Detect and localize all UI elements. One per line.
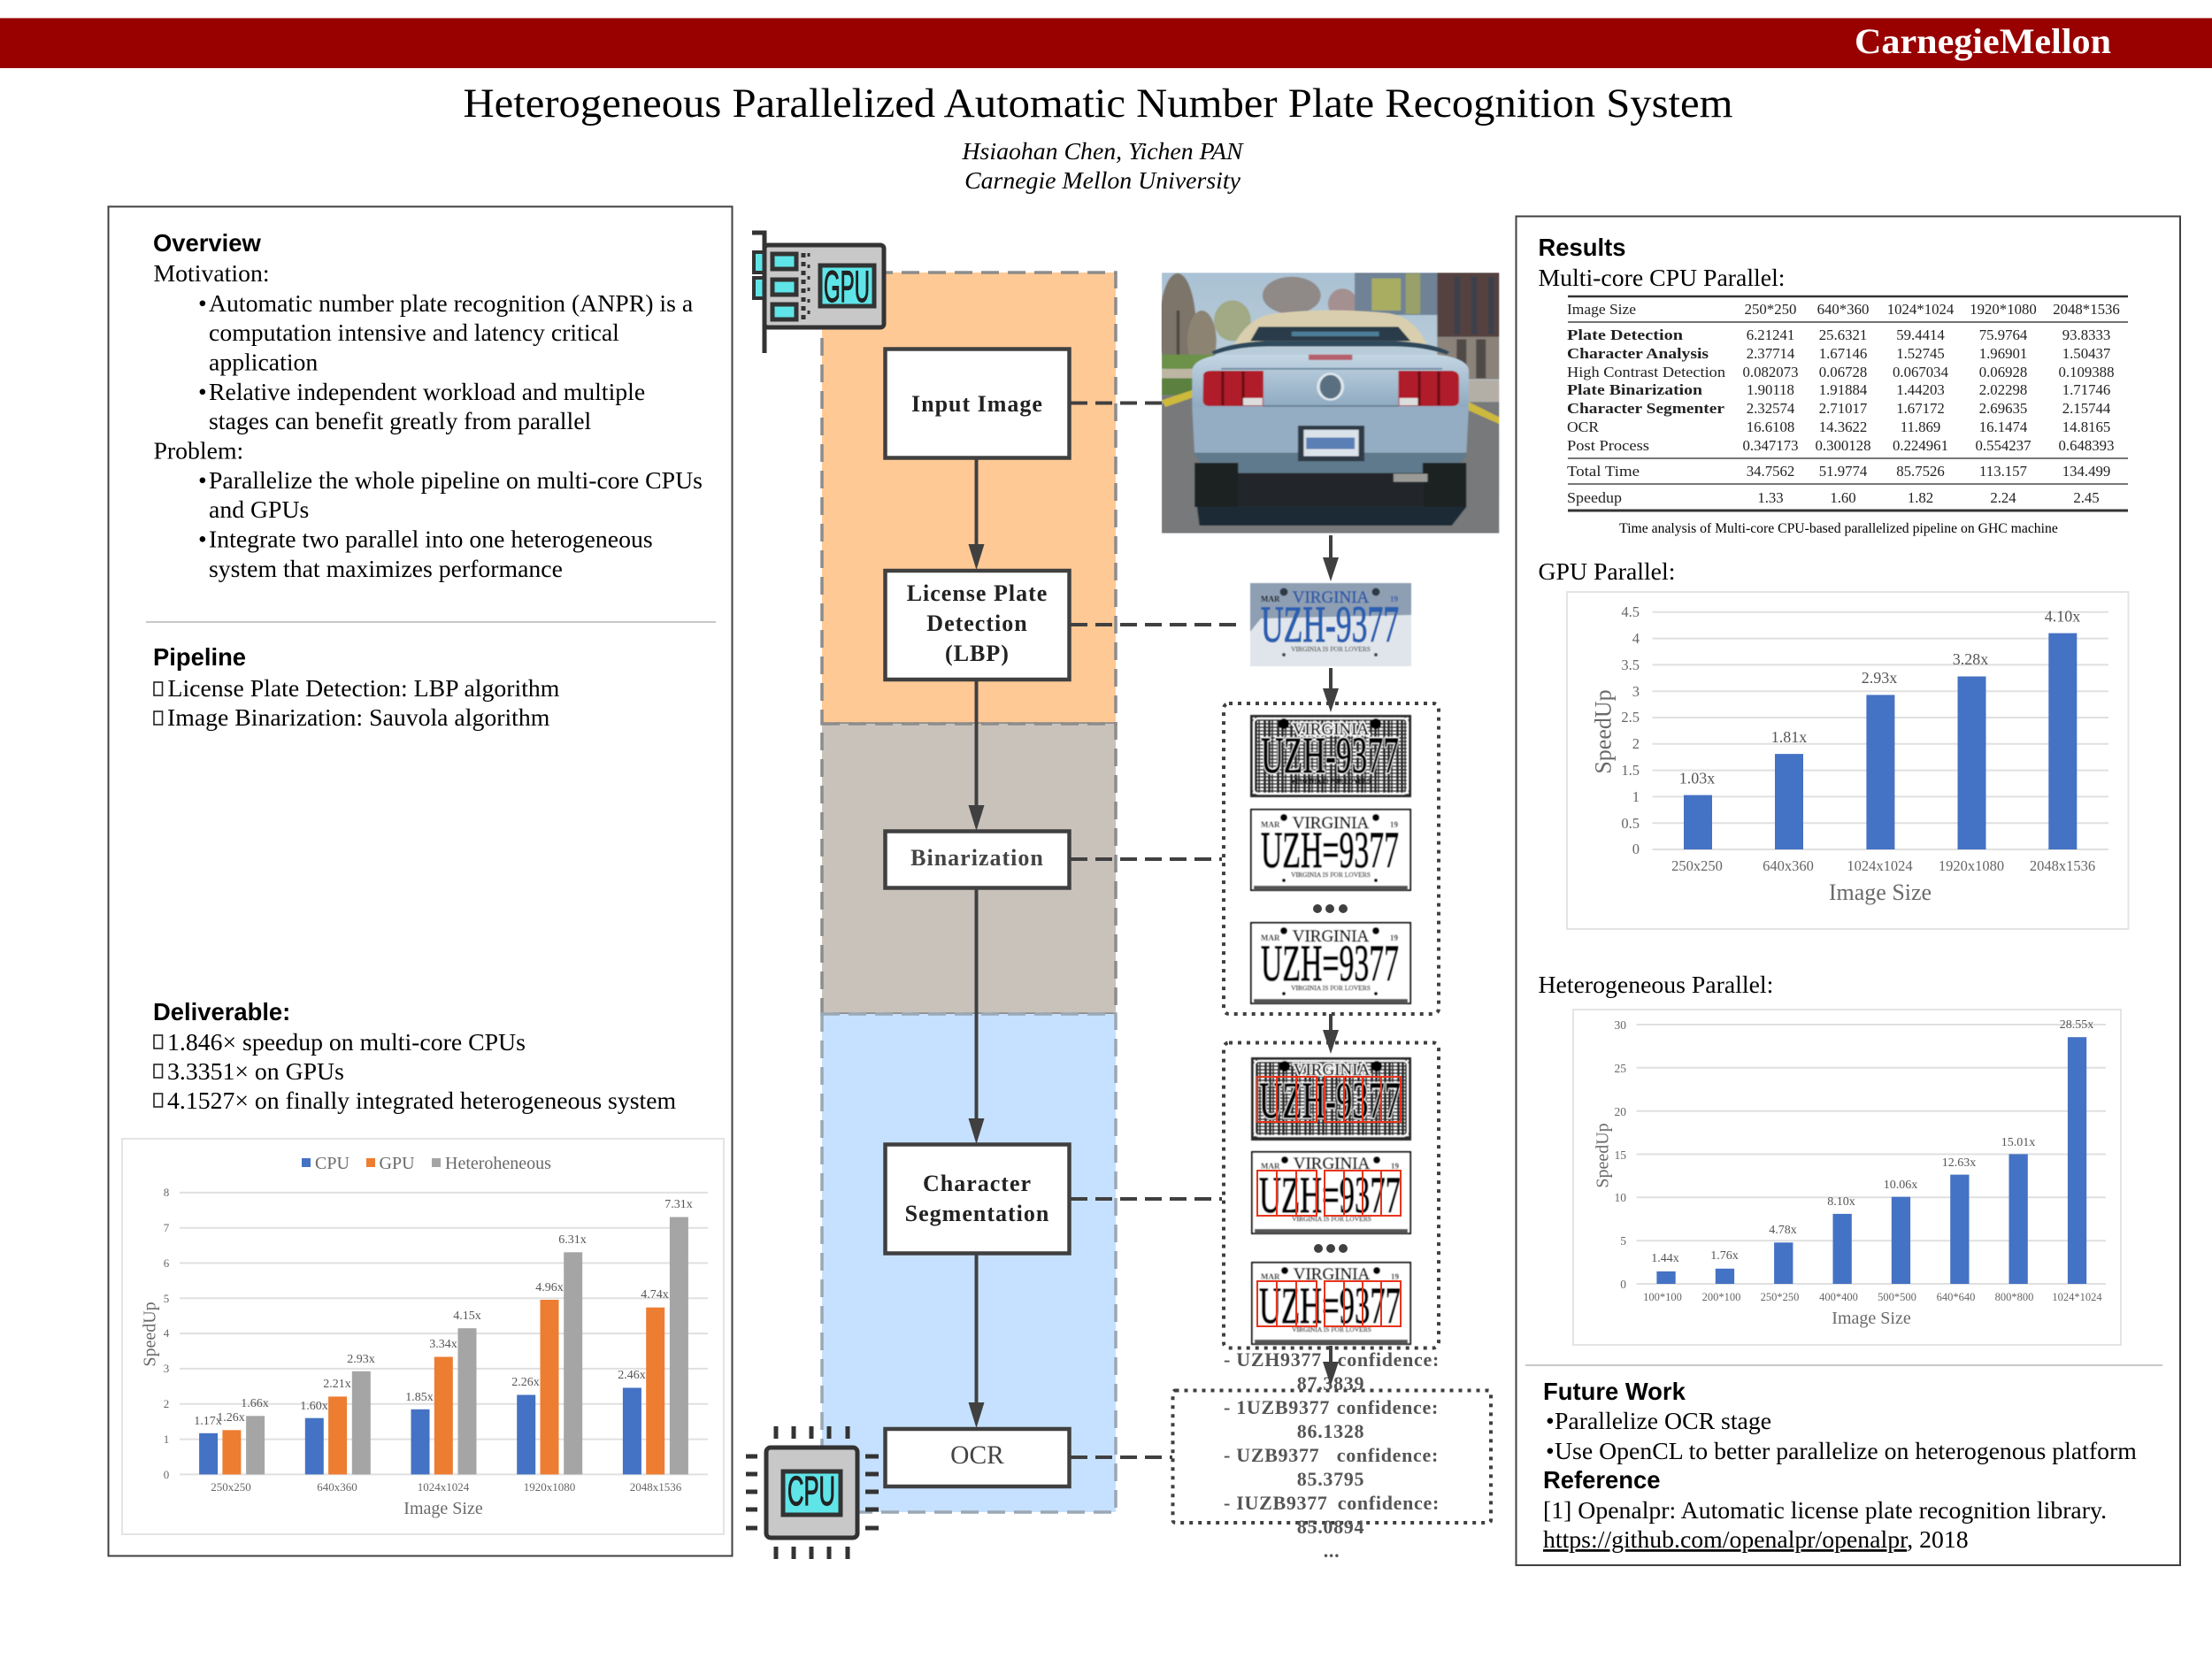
reference text block: Reference <box>1543 1466 1660 1494</box>
bar chart: CPU / GPU / Heterogeneous speedup: 250x250 <box>211 1480 251 1494</box>
table: multi-core CPU timing: 1.96901 <box>1979 345 2027 362</box>
OCR candidates text: - 1UZB9377 <box>1224 1396 1330 1418</box>
bar chart: heterogeneous speedup: Image Size <box>1832 1309 1911 1328</box>
arrow: plate to binarized set <box>1323 668 1339 712</box>
bar chart: GPU speedup: 1920x1080 <box>1939 857 2004 874</box>
plate: noisy binarization: UZH-9377 <box>1261 726 1399 784</box>
deliverable text block: Deliverable: <box>153 998 290 1025</box>
table: multi-core CPU timing: 93.8333 <box>2062 326 2110 343</box>
table: multi-core CPU timing: 0.06728 <box>1819 364 1867 380</box>
plate: noisy with character boxes: UZH-9377 <box>1259 1071 1401 1129</box>
bar chart: GPU speedup: 2.5 <box>1621 709 1640 726</box>
image: cropped licence plate <box>1250 583 1411 666</box>
bar chart: CPU / GPU / Heterogeneous speedup: 4.15x <box>453 1310 481 1323</box>
OCR candidates text: 85.3795 <box>1297 1468 1364 1490</box>
bar chart: GPU speedup: 2048x1536 <box>2030 857 2095 874</box>
OCR candidates text: 87.3839 <box>1297 1372 1364 1394</box>
table: multi-core CPU timing: 25.6321 <box>1819 326 1867 343</box>
OCR candidates text: confidence: <box>1338 1492 1440 1514</box>
plate: clean with character boxes variant <box>1252 1263 1410 1344</box>
bar chart: GPU speedup: 3 <box>1632 683 1640 700</box>
bar chart: GPU speedup: 250x250 <box>1671 857 1723 874</box>
bar chart: GPU speedup: 1.03x <box>1679 770 1715 787</box>
table: multi-core CPU timing: 1.33 <box>1757 489 1784 506</box>
pipeline text block: License Plate Detection: LBP algorithm <box>168 675 560 703</box>
table: multi-core CPU timing: Speedup <box>1567 489 1622 506</box>
overview text block: Automatic number plate recognition (ANPR) is a <box>209 290 693 318</box>
table: multi-core CPU timing: 0.082073 <box>1743 364 1798 380</box>
authors and affiliation <box>961 138 1244 195</box>
plate: clean with character boxes <box>1252 1152 1410 1233</box>
table: multi-core CPU timing: 14.8165 <box>2062 419 2110 435</box>
table: multi-core CPU timing: 6.21241 <box>1747 326 1794 343</box>
table: multi-core CPU timing: 2.71017 <box>1819 400 1867 417</box>
table: multi-core CPU timing: OCR <box>1567 419 1600 435</box>
overview text block: Integrate two parallel into one heterogeneous <box>209 526 653 554</box>
bar chart: CPU / GPU / Heterogeneous speedup: 640x360 <box>317 1480 357 1494</box>
authors and affiliation: Carnegie Mellon University <box>964 167 1241 195</box>
legend: GPU <box>379 1154 415 1173</box>
image: car rear photo <box>1159 273 1500 534</box>
box: license plate detection: License Plate <box>907 580 1048 606</box>
bar chart: CPU / GPU / Heterogeneous speedup: 2048x1536 <box>630 1480 682 1494</box>
arrow: car to plate <box>1323 535 1339 581</box>
plate: clean binarization: VIRGINIA <box>1293 814 1370 833</box>
table: multi-core CPU timing: 250*250 <box>1745 301 1796 318</box>
plate: clean binarization variant: 19 <box>1390 933 1398 942</box>
table: multi-core CPU timing: High Contrast Detection <box>1567 364 1726 380</box>
bar chart: heterogeneous speedup: 200*100 <box>1702 1291 1740 1303</box>
bar chart: GPU speedup: 1.81x <box>1771 728 1807 746</box>
table: multi-core CPU timing: 2.24 <box>1990 489 2016 506</box>
box: character segmentation: Character <box>923 1171 1032 1196</box>
image: cropped licence plate: 19 <box>1390 595 1398 603</box>
deliverable text block <box>153 998 677 1115</box>
bar chart: CPU / GPU / Heterogeneous speedup: 1 <box>164 1432 169 1446</box>
bar chart: GPU speedup: 1.5 <box>1621 762 1640 779</box>
dotted group: binarized plates <box>1224 703 1439 1014</box>
table: multi-core CPU timing: 1920*1080 <box>1970 301 2037 318</box>
overview text block: Relative independent workload and multiple <box>209 379 645 406</box>
bar chart: CPU / GPU / Heterogeneous speedup: 6.31x <box>558 1233 587 1247</box>
future work text block: Future Work <box>1543 1378 1686 1405</box>
bar chart: heterogeneous speedup: 1.44x <box>1651 1252 1679 1265</box>
bar chart: GPU speedup <box>1567 592 2129 929</box>
box: binarization: Binarization <box>910 845 1044 871</box>
bar chart: heterogeneous speedup: 4.78x <box>1769 1224 1797 1237</box>
plate: clean with character boxes variant: MAR <box>1261 1272 1280 1281</box>
box: OCR <box>885 1429 1069 1486</box>
bar chart: CPU / GPU / Heterogeneous speedup: 2.26x <box>511 1376 540 1389</box>
bar chart: GPU speedup: 4.5 <box>1621 603 1640 620</box>
table: multi-core CPU timing <box>1567 296 2128 511</box>
table: multi-core CPU timing: 14.3622 <box>1819 419 1867 435</box>
overview text block: • <box>198 467 207 495</box>
plate: clean binarization variant: UZH=9377 <box>1261 934 1399 992</box>
bar chart: CPU / GPU / Heterogeneous speedup: 2.46x <box>618 1369 646 1382</box>
bar chart: heterogeneous speedup: 10.06x <box>1884 1179 1917 1192</box>
bar chart: heterogeneous speedup: 15.01x <box>2001 1136 2035 1149</box>
table: multi-core CPU timing: Post Process <box>1567 437 1649 454</box>
bar chart: heterogeneous speedup: 12.63x <box>1942 1156 1976 1170</box>
box: license plate detection: (LBP) <box>945 641 1010 666</box>
plate: clean binarization variant: VIRGINIA <box>1293 927 1370 946</box>
bar chart: CPU / GPU / Heterogeneous speedup: 1024x1024 <box>418 1480 470 1494</box>
bar chart: GPU speedup: 4 <box>1632 630 1640 647</box>
icon: GPU card: GPU <box>824 262 870 311</box>
reference text block: [1] Openalpr: Automatic license plate recognition library. <box>1543 1497 2107 1525</box>
bar chart: GPU speedup: 2.93x <box>1862 669 1897 687</box>
bar chart: heterogeneous speedup: 250*250 <box>1761 1291 1799 1303</box>
table: multi-core CPU timing: 2.32574 <box>1747 400 1795 417</box>
box: character segmentation <box>885 1145 1069 1253</box>
panel: right column <box>1517 216 2180 1565</box>
plate: clean with character boxes variant: VIRGINIA <box>1294 1265 1371 1284</box>
bar chart: CPU / GPU / Heterogeneous speedup: 1.85x <box>405 1391 434 1404</box>
table: multi-core CPU timing: 16.1474 <box>1979 419 2028 435</box>
arrow: detection to binarization <box>968 680 984 831</box>
icon: GPU card <box>752 233 884 353</box>
future work text block: Parallelize OCR stage <box>1555 1408 1771 1435</box>
bar chart: heterogeneous speedup: 30 <box>1614 1018 1626 1032</box>
OCR candidates text: - UZH9377 <box>1224 1348 1322 1371</box>
plate: clean binarization variant: VIRGINIA IS FOR LOVERS <box>1291 984 1371 992</box>
reference text block <box>1543 1466 2107 1554</box>
legend <box>302 1154 551 1173</box>
table: multi-core CPU timing: 1.71746 <box>2062 381 2110 398</box>
OCR candidates text: 85.0894 <box>1297 1516 1364 1538</box>
box: license plate detection: Detection <box>926 611 1028 636</box>
plate: clean binarization: UZH=9377 <box>1261 821 1399 879</box>
table: multi-core CPU timing: 0.347173 <box>1743 437 1798 454</box>
band: GPU stages <box>822 273 1116 724</box>
dashed connectors <box>1071 403 1244 1457</box>
overview text block: Problem: <box>154 437 243 465</box>
overview text block <box>153 229 703 583</box>
plate: clean binarization: MAR <box>1261 820 1280 829</box>
bar chart: GPU speedup: SpeedUp <box>1591 689 1616 774</box>
dotted box: OCR results <box>1173 1391 1491 1523</box>
table: multi-core CPU timing: 34.7562 <box>1747 463 1794 480</box>
band: binarization stage <box>822 724 1116 1014</box>
bar chart: heterogeneous speedup: 1.76x <box>1710 1249 1739 1263</box>
plate: noisy binarization: UZH-9377 <box>1261 726 1399 784</box>
table: multi-core CPU timing: 11.869 <box>1901 419 1940 435</box>
table: multi-core CPU timing: 75.9764 <box>1979 326 2028 343</box>
table: multi-core CPU timing: 0.300128 <box>1816 437 1870 454</box>
bar chart: heterogeneous speedup: 8.10x <box>1827 1195 1855 1209</box>
bar chart: CPU / GPU / Heterogeneous speedup: 1.26x <box>217 1411 245 1425</box>
table: multi-core CPU timing: 2.69635 <box>1979 400 2027 417</box>
overview text block: computation intensive and latency critical <box>209 319 619 347</box>
ellipsis dots <box>1314 1244 1348 1253</box>
bar chart: CPU / GPU / Heterogeneous speedup: 8 <box>164 1186 169 1199</box>
dotted group: segmented plates <box>1224 1042 1439 1348</box>
table: multi-core CPU timing: 0.109388 <box>2059 364 2114 380</box>
deliverable text block: 4.1527× on finally integrated heterogeneous system <box>167 1087 677 1115</box>
box: character segmentation: Segmentation <box>905 1201 1049 1226</box>
bar chart: heterogeneous speedup: SpeedUp <box>1593 1123 1612 1188</box>
bar chart: CPU / GPU / Heterogeneous speedup: 1.60x <box>300 1400 328 1413</box>
future work text block <box>1543 1378 2137 1465</box>
table: multi-core CPU timing: Plate Detection <box>1567 326 1684 343</box>
table: multi-core CPU timing: 2.37714 <box>1747 345 1795 362</box>
plate: clean binarization: VIRGINIA IS FOR LOVERS <box>1291 871 1371 879</box>
table: multi-core CPU timing: Character Segmenter <box>1567 400 1725 417</box>
plate: clean with character boxes variant: 19 <box>1391 1272 1400 1281</box>
table: multi-core CPU timing: 0.648393 <box>2059 437 2114 454</box>
bar chart: GPU speedup: 4.10x <box>2045 607 2080 625</box>
OCR candidates text: - IUZB9377 <box>1224 1492 1328 1514</box>
OCR candidates text: ... <box>1324 1540 1340 1562</box>
table: multi-core CPU timing: 134.499 <box>2062 463 2110 480</box>
table: multi-core CPU timing: 0.224961 <box>1893 437 1948 454</box>
bar chart: CPU / GPU / Heterogeneous speedup <box>122 1139 724 1534</box>
bar chart: CPU / GPU / Heterogeneous speedup: Image Size <box>403 1499 483 1518</box>
authors and affiliation: Hsiaohan Chen, Yichen PAN <box>961 138 1244 165</box>
table: multi-core CPU timing: Character Analysis <box>1567 345 1709 362</box>
bar chart: heterogeneous speedup: 28.55x <box>2060 1018 2093 1032</box>
box: input image <box>885 349 1069 458</box>
future work text block: • <box>1546 1408 1555 1435</box>
ellipsis dots <box>1313 904 1348 913</box>
plate: noisy binarization: VIRGINIA IS FOR LOVERS <box>1291 777 1371 785</box>
table: multi-core CPU timing: 16.6108 <box>1747 419 1794 435</box>
table: multi-core CPU timing: Total Time <box>1567 463 1640 480</box>
plate: noisy binarization: VIRGINIA <box>1293 720 1370 739</box>
table: multi-core CPU timing: 1.60 <box>1830 489 1856 506</box>
bar chart: GPU speedup: Image Size <box>1829 879 1932 905</box>
bar chart: CPU / GPU / Heterogeneous speedup: 1.66x <box>241 1397 269 1410</box>
title: Heterogeneous Parallelized Automatic Number Plate Recognition System <box>464 81 1732 127</box>
table: multi-core CPU timing: 2.02298 <box>1979 381 2027 398</box>
table: multi-core CPU timing: 1.50437 <box>2062 345 2110 362</box>
bar chart: CPU / GPU / Heterogeneous speedup: SpeedUp <box>140 1302 159 1367</box>
OCR candidates text: - UZB9377 <box>1224 1444 1319 1466</box>
bar chart: heterogeneous speedup: 1024*1024 <box>2052 1291 2102 1303</box>
plate: clean with character boxes variant: VIRGINIA IS FOR LOVERS <box>1292 1325 1371 1333</box>
icon: CPU chip: CPU <box>787 1468 835 1514</box>
bar chart: CPU / GPU / Heterogeneous speedup: 4 <box>164 1326 170 1340</box>
bar chart: heterogeneous speedup <box>1573 1010 2121 1345</box>
box: binarization <box>885 832 1069 888</box>
bar chart: GPU speedup: 2 <box>1632 735 1640 752</box>
plate: clean with character boxes variant: UZH=9377 <box>1259 1277 1401 1334</box>
table: multi-core CPU timing: 0.067034 <box>1893 364 1949 380</box>
overview text block: application <box>209 349 318 377</box>
table: multi-core CPU timing: 1.52745 <box>1896 345 1945 362</box>
GPU parallel heading: GPU Parallel: <box>1538 558 1675 586</box>
bar chart: CPU / GPU / Heterogeneous speedup: 7.31x <box>664 1198 693 1211</box>
image: cropped licence plate: VIRGINIA <box>1293 588 1370 607</box>
bar chart: heterogeneous speedup: 100*100 <box>1643 1291 1682 1303</box>
image: cropped licence plate: VIRGINIA IS FOR LOVERS <box>1291 645 1371 653</box>
table: multi-core CPU timing: 1.44203 <box>1896 381 1945 398</box>
plate: clean binarization: 19 <box>1390 820 1398 829</box>
bar chart: CPU / GPU / Heterogeneous speedup: 4.96x <box>535 1281 564 1294</box>
OCR candidates text: confidence: <box>1338 1348 1440 1371</box>
bar chart: heterogeneous speedup: 10 <box>1614 1191 1626 1204</box>
bar chart: GPU speedup: 0.5 <box>1621 815 1640 832</box>
bar chart: CPU / GPU / Heterogeneous speedup: 1920x1080 <box>524 1480 575 1494</box>
bar chart: CPU / GPU / Heterogeneous speedup: 1.17x <box>194 1415 222 1428</box>
overview text block: and GPUs <box>209 496 309 524</box>
plate: noisy binarization: VIRGINIA <box>1293 720 1370 739</box>
table: multi-core CPU timing: 2.15744 <box>2062 400 2111 417</box>
plate: clean binarization <box>1251 810 1410 890</box>
box: input image: Input Image <box>911 391 1043 417</box>
table: multi-core CPU timing: 59.4414 <box>1896 326 1945 343</box>
overview text block: Motivation: <box>154 260 270 288</box>
heterogeneous parallel heading: Heterogeneous Parallel: <box>1538 972 1773 999</box>
plate: noisy binarization <box>1250 715 1411 797</box>
table: multi-core CPU timing: 1.82 <box>1908 489 1933 506</box>
plate: clean with character boxes: VIRGINIA IS FOR LOVERS <box>1292 1215 1371 1223</box>
future work text block: • <box>1546 1438 1555 1465</box>
pipeline text block: Pipeline <box>153 643 246 671</box>
plate: clean with character boxes: 19 <box>1391 1162 1400 1171</box>
overview text block: Parallelize the whole pipeline on multi-core CPUs <box>209 467 703 495</box>
table: multi-core CPU timing: 113.157 <box>1979 463 2027 480</box>
arrow: binarization to segmentation <box>968 888 984 1144</box>
table: multi-core CPU timing: 2048*1536 <box>2053 301 2120 318</box>
plate: noisy with character boxes: UZH-9377 <box>1259 1071 1401 1129</box>
panel: stage bands <box>822 273 1116 1512</box>
flow: pipeline boxes <box>885 349 1069 1486</box>
bar chart: heterogeneous speedup: 800*800 <box>1995 1291 2033 1303</box>
results heading <box>1538 234 1786 292</box>
plate: clean binarization variant: MAR <box>1261 933 1280 942</box>
image: cropped licence plate: UZH-9377 <box>1261 595 1399 653</box>
pipeline text block: Image Binarization: Sauvola algorithm <box>167 704 550 732</box>
legend: Heteroheneous <box>445 1154 551 1173</box>
bar chart: heterogeneous speedup: 0 <box>1620 1278 1626 1291</box>
table: multi-core CPU timing: 1.67172 <box>1896 400 1945 417</box>
table: multi-core CPU timing: 1.91884 <box>1819 381 1868 398</box>
OCR candidates text: confidence: <box>1337 1396 1439 1418</box>
bar chart: heterogeneous speedup: 5 <box>1620 1234 1626 1248</box>
bar chart: heterogeneous speedup: 640*640 <box>1937 1291 1975 1303</box>
arrow: binarized set to segmentation set <box>1323 1014 1339 1054</box>
plate: clean binarization variant <box>1251 923 1410 1003</box>
plate: clean with character boxes: MAR <box>1261 1162 1280 1171</box>
bar chart: heterogeneous speedup: 500*500 <box>1878 1291 1916 1303</box>
logo: Carnegie Mellon: CarnegieMellon <box>1855 21 2111 61</box>
overview text block: • <box>198 290 207 318</box>
overview text block: Overview <box>153 229 262 257</box>
OCR candidates text: confidence: <box>1337 1444 1439 1466</box>
bar chart: CPU / GPU / Heterogeneous speedup: 3.34x <box>429 1338 457 1351</box>
bar chart: CPU / GPU / Heterogeneous speedup: 5 <box>164 1292 169 1305</box>
bar chart: CPU / GPU / Heterogeneous speedup: 0 <box>164 1468 169 1481</box>
panel: left column <box>108 207 733 1555</box>
overview text block: system that maximizes performance <box>209 556 563 583</box>
plate: clean with character boxes: UZH=9377 <box>1259 1166 1401 1224</box>
box: OCR: OCR <box>950 1441 1004 1470</box>
bar chart: CPU / GPU / Heterogeneous speedup: 2 <box>164 1397 169 1410</box>
legend: CPU <box>315 1154 349 1173</box>
bar chart: GPU speedup: 0 <box>1632 841 1640 857</box>
results heading: Multi-core CPU Parallel: <box>1538 265 1786 292</box>
plate: noisy with character boxes <box>1251 1057 1411 1141</box>
table: multi-core CPU timing: 1.90118 <box>1747 381 1794 398</box>
bar chart: GPU speedup: 3.5 <box>1621 657 1640 673</box>
bar chart: heterogeneous speedup: 20 <box>1614 1105 1626 1118</box>
OCR candidates text <box>1224 1348 1440 1562</box>
table: multi-core CPU timing: Image Size <box>1567 301 1636 318</box>
plate: clean with character boxes: VIRGINIA <box>1294 1155 1371 1173</box>
table: multi-core CPU timing: 1024*1024 <box>1887 301 1955 318</box>
band: CPU stages <box>822 1014 1116 1512</box>
bar chart: GPU speedup: 3.28x <box>1953 650 1988 668</box>
arrow: input to detection <box>968 457 984 570</box>
bar chart: heterogeneous speedup: 400*400 <box>1819 1291 1858 1303</box>
overview text block: • <box>198 379 207 406</box>
bar chart: CPU / GPU / Heterogeneous speedup: 2.93x <box>347 1353 375 1366</box>
deliverable text block: 3.3351× on GPUs <box>167 1058 344 1086</box>
table: multi-core CPU timing: 51.9774 <box>1819 463 1868 480</box>
bar chart: CPU / GPU / Heterogeneous speedup: 7 <box>164 1221 170 1234</box>
bar chart: CPU / GPU / Heterogeneous speedup: 6 <box>164 1256 170 1270</box>
future work text block: Use OpenCL to better parallelize on heterogenous platform <box>1555 1438 2137 1465</box>
header bar <box>0 18 2212 68</box>
arrow: segmented plates to OCR results <box>1323 1346 1339 1386</box>
image: cropped licence plate: MAR <box>1261 595 1280 603</box>
bar chart: CPU / GPU / Heterogeneous speedup: 4.74x <box>641 1288 669 1302</box>
table caption: Time analysis of Multi-core CPU-based parallelized pipeline on GHC machine <box>1619 521 2058 536</box>
bar chart: GPU speedup: 1 <box>1632 788 1640 805</box>
table: multi-core CPU timing: 0.06928 <box>1979 364 2027 380</box>
icon: CPU chip <box>746 1426 879 1559</box>
bar chart: GPU speedup: 640x360 <box>1763 857 1814 874</box>
table: multi-core CPU timing: 1.67146 <box>1819 345 1867 362</box>
plate: noisy with character boxes: VIRGINIA <box>1294 1061 1371 1079</box>
table: multi-core CPU timing: 640*360 <box>1817 301 1869 318</box>
arrow: segmentation to OCR <box>968 1254 984 1428</box>
pipeline text block <box>153 643 560 732</box>
overview text block: stages can benefit greatly from parallel <box>209 408 592 435</box>
reference text block: https://github.com/openalpr/openalpr, 2018 <box>1543 1526 1969 1554</box>
table: multi-core CPU timing: 85.7526 <box>1896 463 1945 480</box>
overview text block: • <box>198 526 207 554</box>
bar chart: CPU / GPU / Heterogeneous speedup: 2.21x <box>323 1378 351 1391</box>
plate: noisy with character boxes: VIRGINIA <box>1294 1061 1371 1079</box>
table: multi-core CPU timing: Plate Binarization <box>1567 381 1703 398</box>
table: multi-core CPU timing: 0.554237 <box>1976 437 2031 454</box>
box: license plate detection <box>885 571 1069 680</box>
OCR candidates text: 86.1328 <box>1297 1420 1364 1442</box>
bar chart: heterogeneous speedup: 15 <box>1614 1148 1626 1162</box>
bar chart: CPU / GPU / Heterogeneous speedup: 3 <box>164 1362 169 1375</box>
results heading: Results <box>1538 234 1625 261</box>
deliverable text block: 1.846× speedup on multi-core CPUs <box>167 1029 526 1056</box>
bar chart: heterogeneous speedup: 25 <box>1614 1062 1626 1075</box>
table: multi-core CPU timing: 2.45 <box>2073 489 2100 506</box>
bar chart: GPU speedup: 1024x1024 <box>1847 857 1913 874</box>
